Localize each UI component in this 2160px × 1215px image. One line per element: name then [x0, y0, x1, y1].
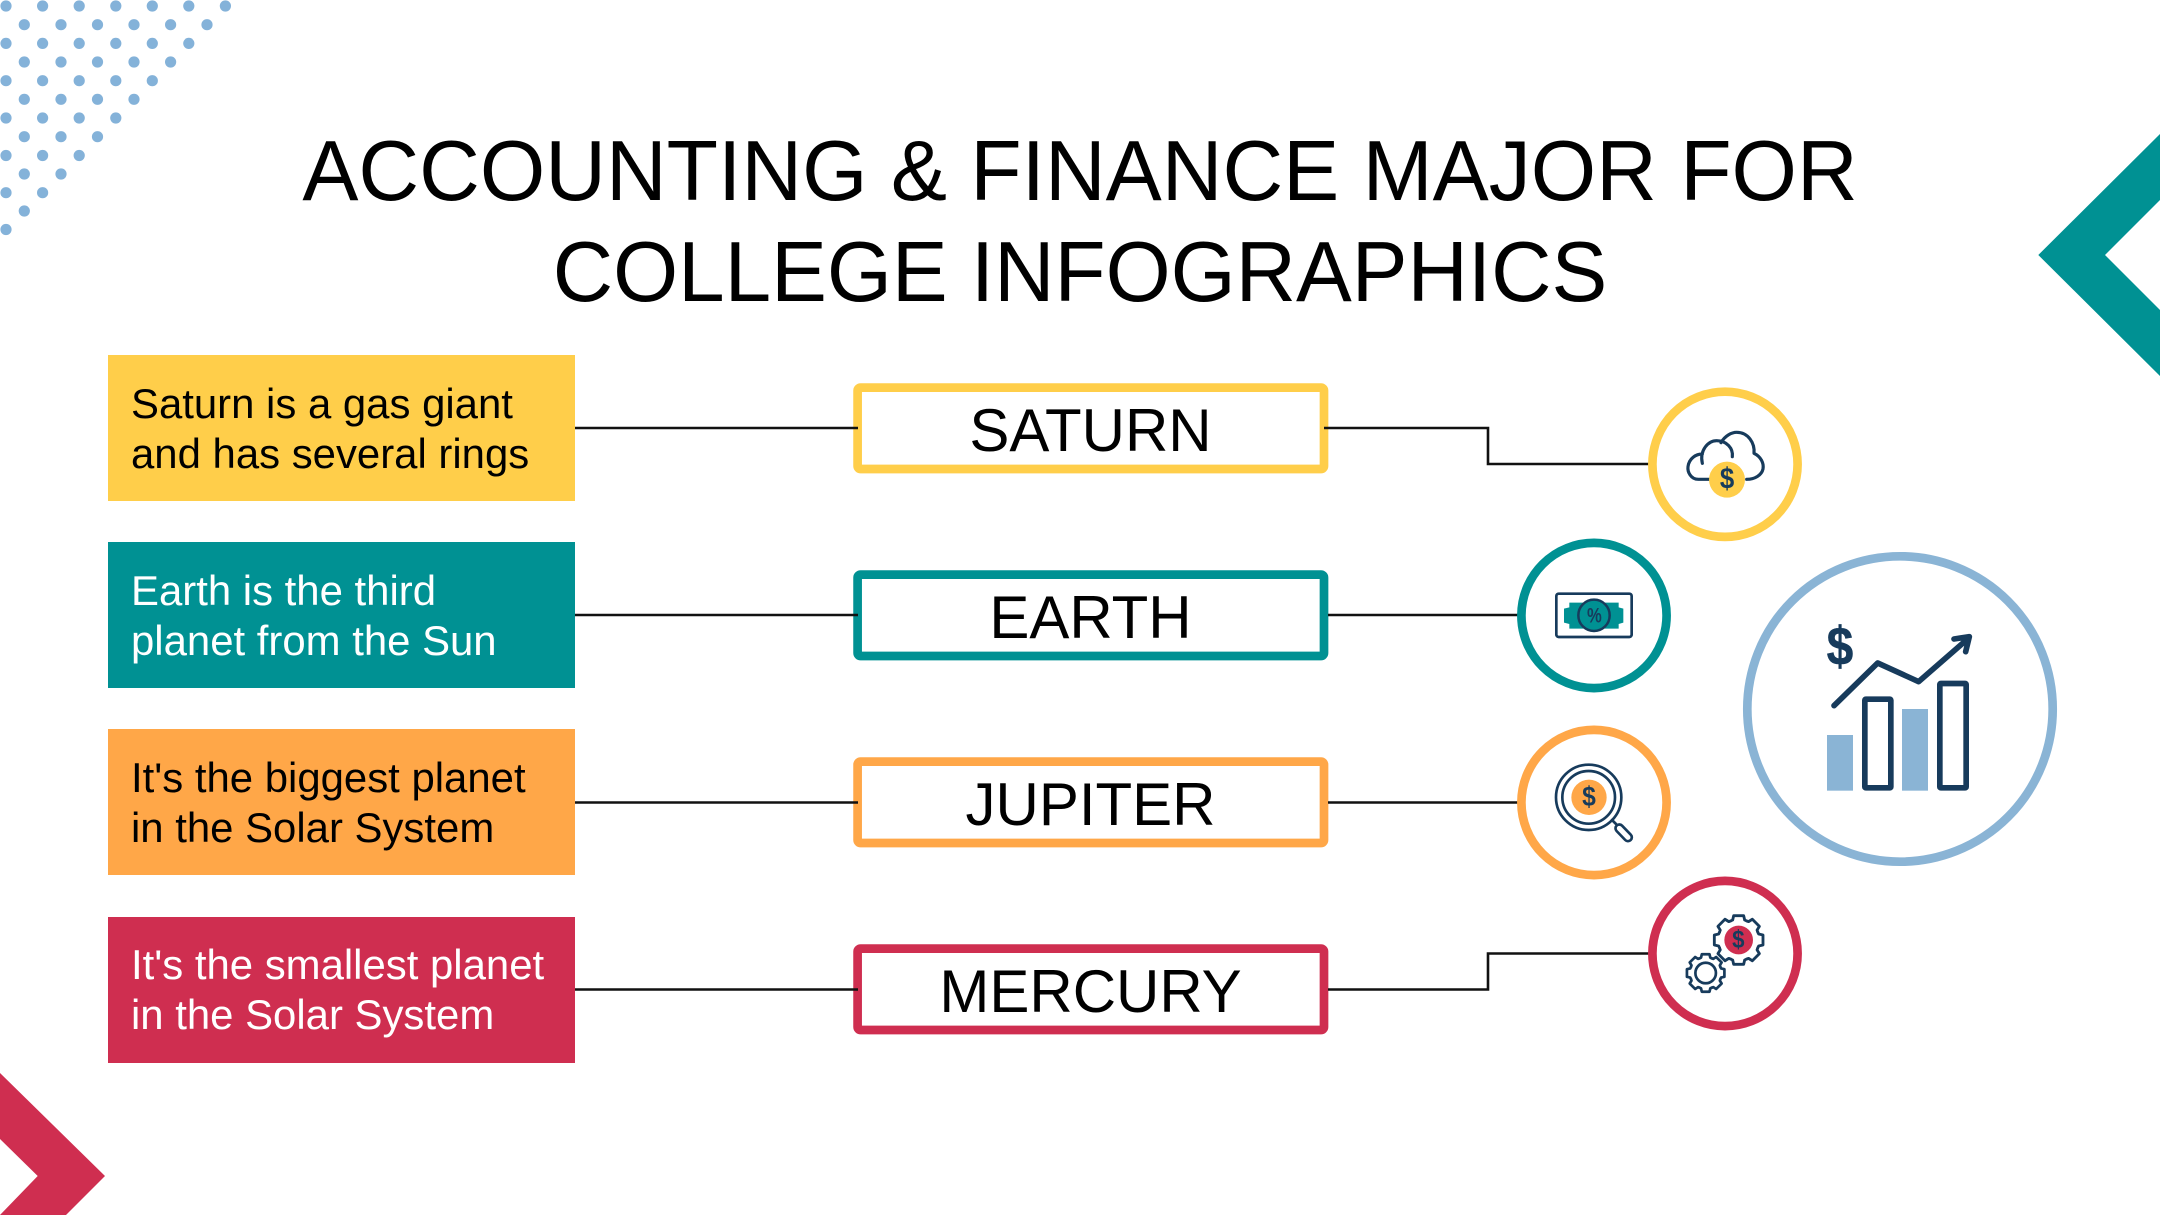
connector: Saturn description to label	[575, 427, 858, 429]
title: ACCOUNTING & FINANCE MAJOR FOR	[302, 122, 1858, 218]
connector: Mercury label to icon	[1328, 954, 1652, 990]
description box: Jupiter: It's the biggest planet	[131, 754, 526, 801]
connector: Mercury description to label	[575, 988, 858, 991]
title	[302, 122, 1858, 319]
description box: Earth: Earth is the third	[131, 567, 436, 614]
label box: Saturn: SATURN	[969, 397, 1212, 464]
row: Earth	[108, 542, 1667, 688]
connector: Jupiter label to icon	[1328, 801, 1522, 804]
title: COLLEGE INFOGRAPHICS	[553, 223, 1607, 319]
label box: Earth	[858, 575, 1324, 656]
central icon: growth chart with dollar	[1747, 556, 2053, 862]
label box: Mercury: MERCURY	[939, 958, 1242, 1025]
icon: gears with dollar: $	[1732, 925, 1745, 954]
description box: Saturn: Saturn is a gas giant	[131, 380, 513, 427]
icon: banknote with percent	[1521, 543, 1667, 688]
decoration: dot pattern	[0, 0, 231, 235]
connector: Earth label to icon	[1328, 614, 1521, 616]
icon: gears with dollar	[1652, 881, 1798, 1026]
description box: Mercury	[108, 917, 575, 1063]
icon: cloud with dollar coin	[1652, 392, 1798, 537]
description box: Earth: planet from the Sun	[131, 617, 497, 664]
connector: Saturn label to icon	[1324, 428, 1652, 464]
label box: Jupiter: JUPITER	[965, 771, 1216, 838]
description box: Earth	[108, 542, 575, 688]
description box: Jupiter: in the Solar System	[131, 804, 494, 851]
label box: Earth: EARTH	[989, 584, 1192, 651]
icon: magnifier with dollar	[1521, 730, 1667, 875]
decoration: red chevron	[0, 1073, 105, 1215]
row: Jupiter	[108, 729, 1667, 875]
row: Mercury	[108, 881, 1798, 1063]
row: Saturn	[108, 355, 1798, 537]
connector: Jupiter description to label	[575, 801, 858, 804]
label box: Saturn	[858, 388, 1324, 469]
icon: magnifier with dollar: $	[1582, 780, 1596, 812]
description box: Jupiter	[108, 729, 575, 875]
icon: cloud with dollar coin: $	[1720, 462, 1734, 495]
description box: Saturn: and has several rings	[131, 430, 529, 477]
description box: Saturn	[108, 355, 575, 501]
description box: Mercury: It's the smallest planet	[131, 941, 544, 988]
central icon: growth chart with dollar: $	[1827, 616, 1853, 676]
decoration: teal chevron	[2038, 134, 2160, 376]
label box: Jupiter	[858, 762, 1324, 843]
icon: banknote with percent: %	[1587, 605, 1602, 628]
label box: Mercury	[858, 949, 1324, 1030]
connector: Earth description to label	[575, 614, 858, 616]
description box: Mercury: in the Solar System	[131, 991, 494, 1038]
